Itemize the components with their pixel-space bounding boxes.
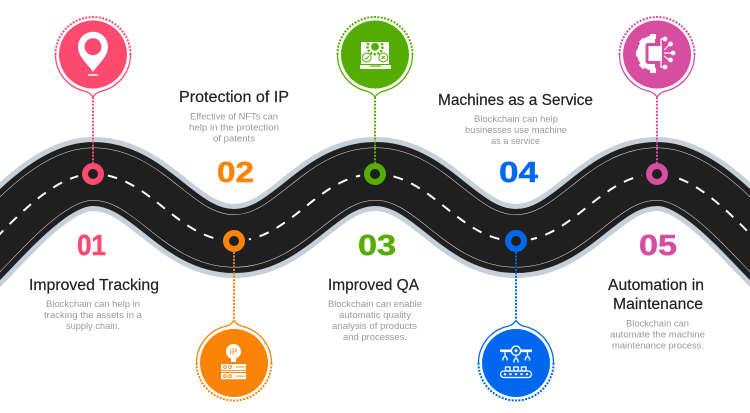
heading: automation in maintenance: Automation in <box>608 277 704 294</box>
number 01: 01 <box>77 230 106 262</box>
description 2: help in the protection <box>189 122 279 134</box>
step 2: protection of IP <box>179 89 289 400</box>
step 5: automation in maintenance <box>608 17 708 352</box>
step 3: improved QA <box>328 17 425 343</box>
icon: conveyor robot arms <box>500 346 532 378</box>
description 2: of patents <box>213 134 255 144</box>
heading: improved tracking: Improved Tracking <box>29 277 159 294</box>
description 3: and processes. <box>343 332 407 343</box>
description 4: as a service <box>491 136 540 147</box>
badge 1 <box>55 17 131 97</box>
badge 4 <box>478 320 554 400</box>
description 2: Effective of NFTs can <box>190 112 278 122</box>
connector 1 <box>92 97 94 165</box>
number 02: 02 <box>217 157 254 189</box>
description 3: Blockchain can enable <box>328 299 422 310</box>
heading: improved QA: Improved QA <box>328 277 420 294</box>
connector 5 <box>656 97 658 165</box>
icon: location pin <box>78 32 108 76</box>
icon: IP server: IP <box>229 347 238 357</box>
step 4: machines as a service <box>438 92 593 400</box>
road marker 4 <box>508 233 524 249</box>
description 1: supply chain. <box>66 321 120 332</box>
description 1: Blockchain can help in <box>46 299 140 310</box>
description 5: maintenance process. <box>612 340 704 352</box>
winding road <box>0 159 750 265</box>
description 5: automate the machine <box>610 330 705 340</box>
description 3: analysis of products <box>332 321 417 332</box>
description 3: automatic quality <box>339 310 411 321</box>
road marker 3 <box>367 166 383 182</box>
heading: machines as a service: Machines as a Service <box>438 92 593 109</box>
road marker 1 <box>85 166 101 182</box>
connector 2 <box>233 252 235 320</box>
road marker 5 <box>649 166 665 182</box>
description 4: Blockchain can help <box>474 114 558 125</box>
road marker 2 <box>226 233 242 249</box>
heading: protection of IP: Protection of IP <box>179 89 289 106</box>
badge 2 <box>196 320 272 400</box>
number 03: 03 <box>358 230 396 262</box>
number 05: 05 <box>639 230 677 262</box>
icon: gear with circuit chip <box>636 34 675 73</box>
badge 3 <box>337 17 413 97</box>
badge 5 <box>619 17 695 97</box>
icon: laptop with gear and checks <box>360 39 391 69</box>
connector 3 <box>374 97 376 165</box>
step 1: improved tracking <box>29 17 159 332</box>
description 1: tracking the assets in a <box>44 310 143 321</box>
description 5: Blockchain can <box>626 318 689 330</box>
number 04: 04 <box>499 157 538 189</box>
description 4: businesses use machine <box>465 125 567 136</box>
heading: automation in maintenance: Maintenance <box>613 296 703 313</box>
connector 4 <box>515 252 517 320</box>
